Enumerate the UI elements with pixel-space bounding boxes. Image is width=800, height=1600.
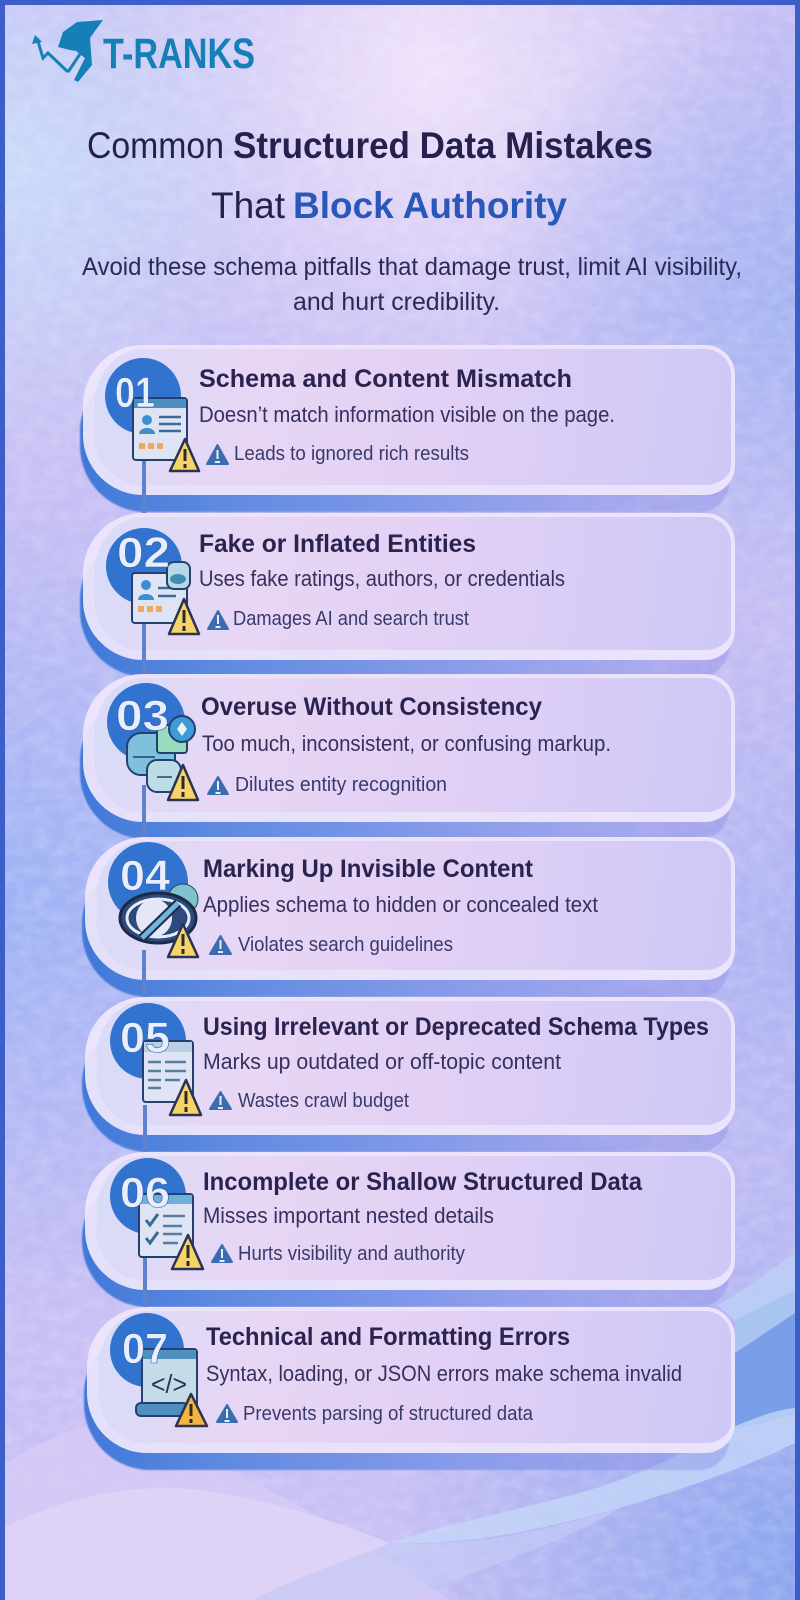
panel: mistake 04 bbox=[81, 837, 735, 998]
number 02: 02 bbox=[117, 529, 170, 577]
title bbox=[87, 125, 653, 226]
panel: mistake 05 bbox=[81, 997, 735, 1152]
note with alert icon: Damages AI and search trust bbox=[233, 607, 469, 630]
icon: checklist window with warning bbox=[139, 1194, 203, 1269]
number 03: 03 bbox=[116, 692, 169, 740]
title: Common bbox=[87, 125, 224, 166]
note with alert icon: Hurts visibility and authority bbox=[238, 1242, 466, 1265]
note with alert icon: Dilutes entity recognition bbox=[235, 773, 447, 796]
subtitle bbox=[82, 253, 742, 316]
heading: Using Irrelevant or Deprecated Schema Types bbox=[203, 1013, 709, 1041]
logo: T-RANKS bbox=[32, 20, 255, 82]
badge circle 04 bbox=[108, 842, 188, 922]
panel: mistake 07 bbox=[83, 1307, 735, 1471]
note with alert icon: Wastes crawl budget bbox=[238, 1089, 409, 1112]
heading: Schema and Content Mismatch bbox=[199, 365, 572, 393]
panel: mistake 02 bbox=[79, 513, 735, 676]
panel: mistake 06 bbox=[81, 1152, 735, 1308]
description: Doesn’t match information visible on the page. bbox=[199, 402, 615, 427]
badge circle 06 bbox=[110, 1158, 186, 1234]
heading: Marking Up Invisible Content bbox=[203, 855, 534, 883]
number 05: 05 bbox=[120, 1014, 170, 1062]
description: Marks up outdated or off-topic content bbox=[203, 1049, 561, 1074]
note with alert icon: Violates search guidelines bbox=[238, 933, 453, 956]
note with alert icon: Prevents parsing of structured data bbox=[243, 1402, 534, 1425]
icon: code laptop with warning bbox=[136, 1349, 207, 1426]
number 06: 06 bbox=[120, 1169, 170, 1217]
description: Too much, inconsistent, or confusing markup. bbox=[202, 731, 611, 756]
number 01: 01 bbox=[115, 369, 155, 417]
icon: crossed-out eye with warning bbox=[120, 884, 198, 957]
heading: Incomplete or Shallow Structured Data bbox=[203, 1168, 643, 1196]
heading: Overuse Without Consistency bbox=[201, 693, 542, 721]
description: Misses important nested details bbox=[203, 1203, 494, 1228]
description: Uses fake ratings, authors, or credentials bbox=[199, 566, 565, 591]
subtitle: Avoid these schema pitfalls that damage trust, limit AI visibility, bbox=[82, 253, 742, 281]
description: Syntax, loading, or JSON errors make schema invalid bbox=[206, 1361, 682, 1386]
panel: mistake 01 bbox=[79, 345, 735, 514]
badge circle 03 bbox=[107, 683, 185, 761]
icon: profile with fake badge and warning bbox=[132, 562, 199, 634]
icon: document list with warning bbox=[143, 1041, 201, 1115]
badge circle 05 bbox=[110, 1003, 186, 1079]
number 07: 07 bbox=[122, 1325, 168, 1373]
icon: dinosaur head and rising arrow bbox=[32, 20, 103, 82]
badge circle 02 bbox=[106, 528, 182, 604]
panel: mistake 03 bbox=[79, 674, 735, 838]
title: Block Authority bbox=[293, 185, 567, 226]
heading: Fake or Inflated Entities bbox=[199, 530, 476, 558]
subtitle: and hurt credibility. bbox=[293, 288, 500, 316]
description: Applies schema to hidden or concealed text bbox=[203, 892, 598, 917]
title: That bbox=[211, 185, 286, 226]
icon: code laptop with warning: </> bbox=[151, 1369, 187, 1399]
note with alert icon: Leads to ignored rich results bbox=[234, 442, 469, 465]
badge circle 07 bbox=[110, 1313, 184, 1387]
heading: Technical and Formatting Errors bbox=[206, 1323, 570, 1351]
title: Structured Data Mistakes bbox=[233, 125, 653, 166]
icon: overlapping markup layers with warning bbox=[127, 716, 198, 800]
number 04: 04 bbox=[120, 852, 170, 900]
icon: profile window with warning bbox=[133, 398, 199, 471]
badge circle 01 bbox=[105, 358, 181, 434]
